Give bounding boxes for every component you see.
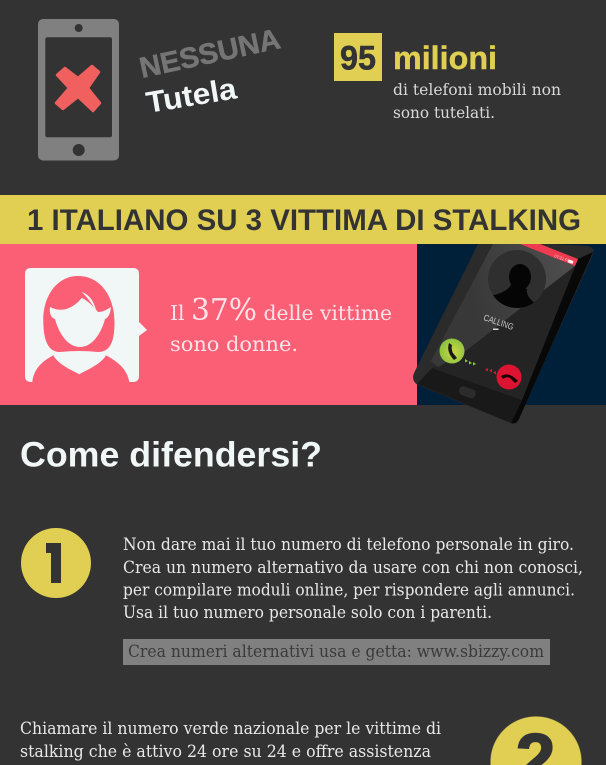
panel: 95 million stat	[334, 33, 561, 122]
panel: no protection	[38, 19, 283, 160]
text block: phones not protected: sono tutelati.	[393, 103, 495, 122]
heading: Tutela: Tutela	[144, 72, 239, 120]
banner: 1 italiano su 3	[0, 195, 606, 244]
text block: step 2 advice: Chiamare il numero verde nazionale per le vittime di	[20, 719, 441, 738]
text block: phones not protected	[393, 80, 561, 122]
text block: 37% of victims are women: Il 37% delle vittime	[170, 293, 392, 328]
banner: 1 italiano su 3: 1 ITALIANO SU 3 VITTIMA DI STALKING	[27, 204, 581, 237]
text block: step 1 advice: Non dare mai il tuo numero di telefono personale in giro.	[123, 535, 574, 554]
icon: answer button	[440, 338, 476, 366]
heading: milioni: milioni	[393, 40, 497, 76]
number circle 2	[490, 716, 582, 765]
panel: navy background	[417, 244, 606, 405]
number circle 1: 1	[39, 532, 71, 596]
status bar: 07:21 PM	[554, 253, 571, 264]
caption: CALLING: CALLING	[482, 312, 515, 332]
panel: pink background	[0, 244, 417, 405]
text block: step 2 advice	[20, 719, 441, 761]
avatar	[488, 250, 546, 308]
text block: step 1 advice: Usa il tuo numero personale solo con i parenti.	[123, 603, 492, 622]
icon: decline button	[485, 364, 522, 390]
heading: come difendersi: Come difendersi?	[20, 436, 322, 475]
text block: step 1 advice: Crea un numero alternativo da usare con chi non conosci,	[123, 558, 583, 577]
number badge: 95: 95	[340, 40, 376, 78]
step 1	[21, 528, 583, 665]
status bar	[520, 244, 578, 266]
text block: step 1 advice: per compilare moduli online, per rispondere agli annunci.	[123, 580, 575, 600]
icon: woman speech bubble	[25, 268, 147, 382]
heading: NESSUNA: NESSUNA	[137, 23, 283, 85]
number badge: 95	[334, 33, 382, 81]
text block: 37% of victims are women: sono donne.	[170, 332, 298, 356]
callout: disposable numbers: Crea numeri alternativi usa e getta: www.sbizzy.com	[128, 642, 544, 661]
icon: phone with X	[38, 19, 119, 160]
text block: phones not protected: di telefoni mobili non	[393, 80, 561, 99]
illustration: calling phone	[413, 240, 593, 424]
text block: step 2 advice: stalking che è attivo 24 ore su 24 e offre assistenza	[20, 742, 431, 761]
text block: step 1 advice	[123, 535, 583, 622]
text block: 37% of victims are women	[170, 293, 392, 356]
home button	[458, 385, 477, 399]
number circle 1	[21, 528, 91, 598]
